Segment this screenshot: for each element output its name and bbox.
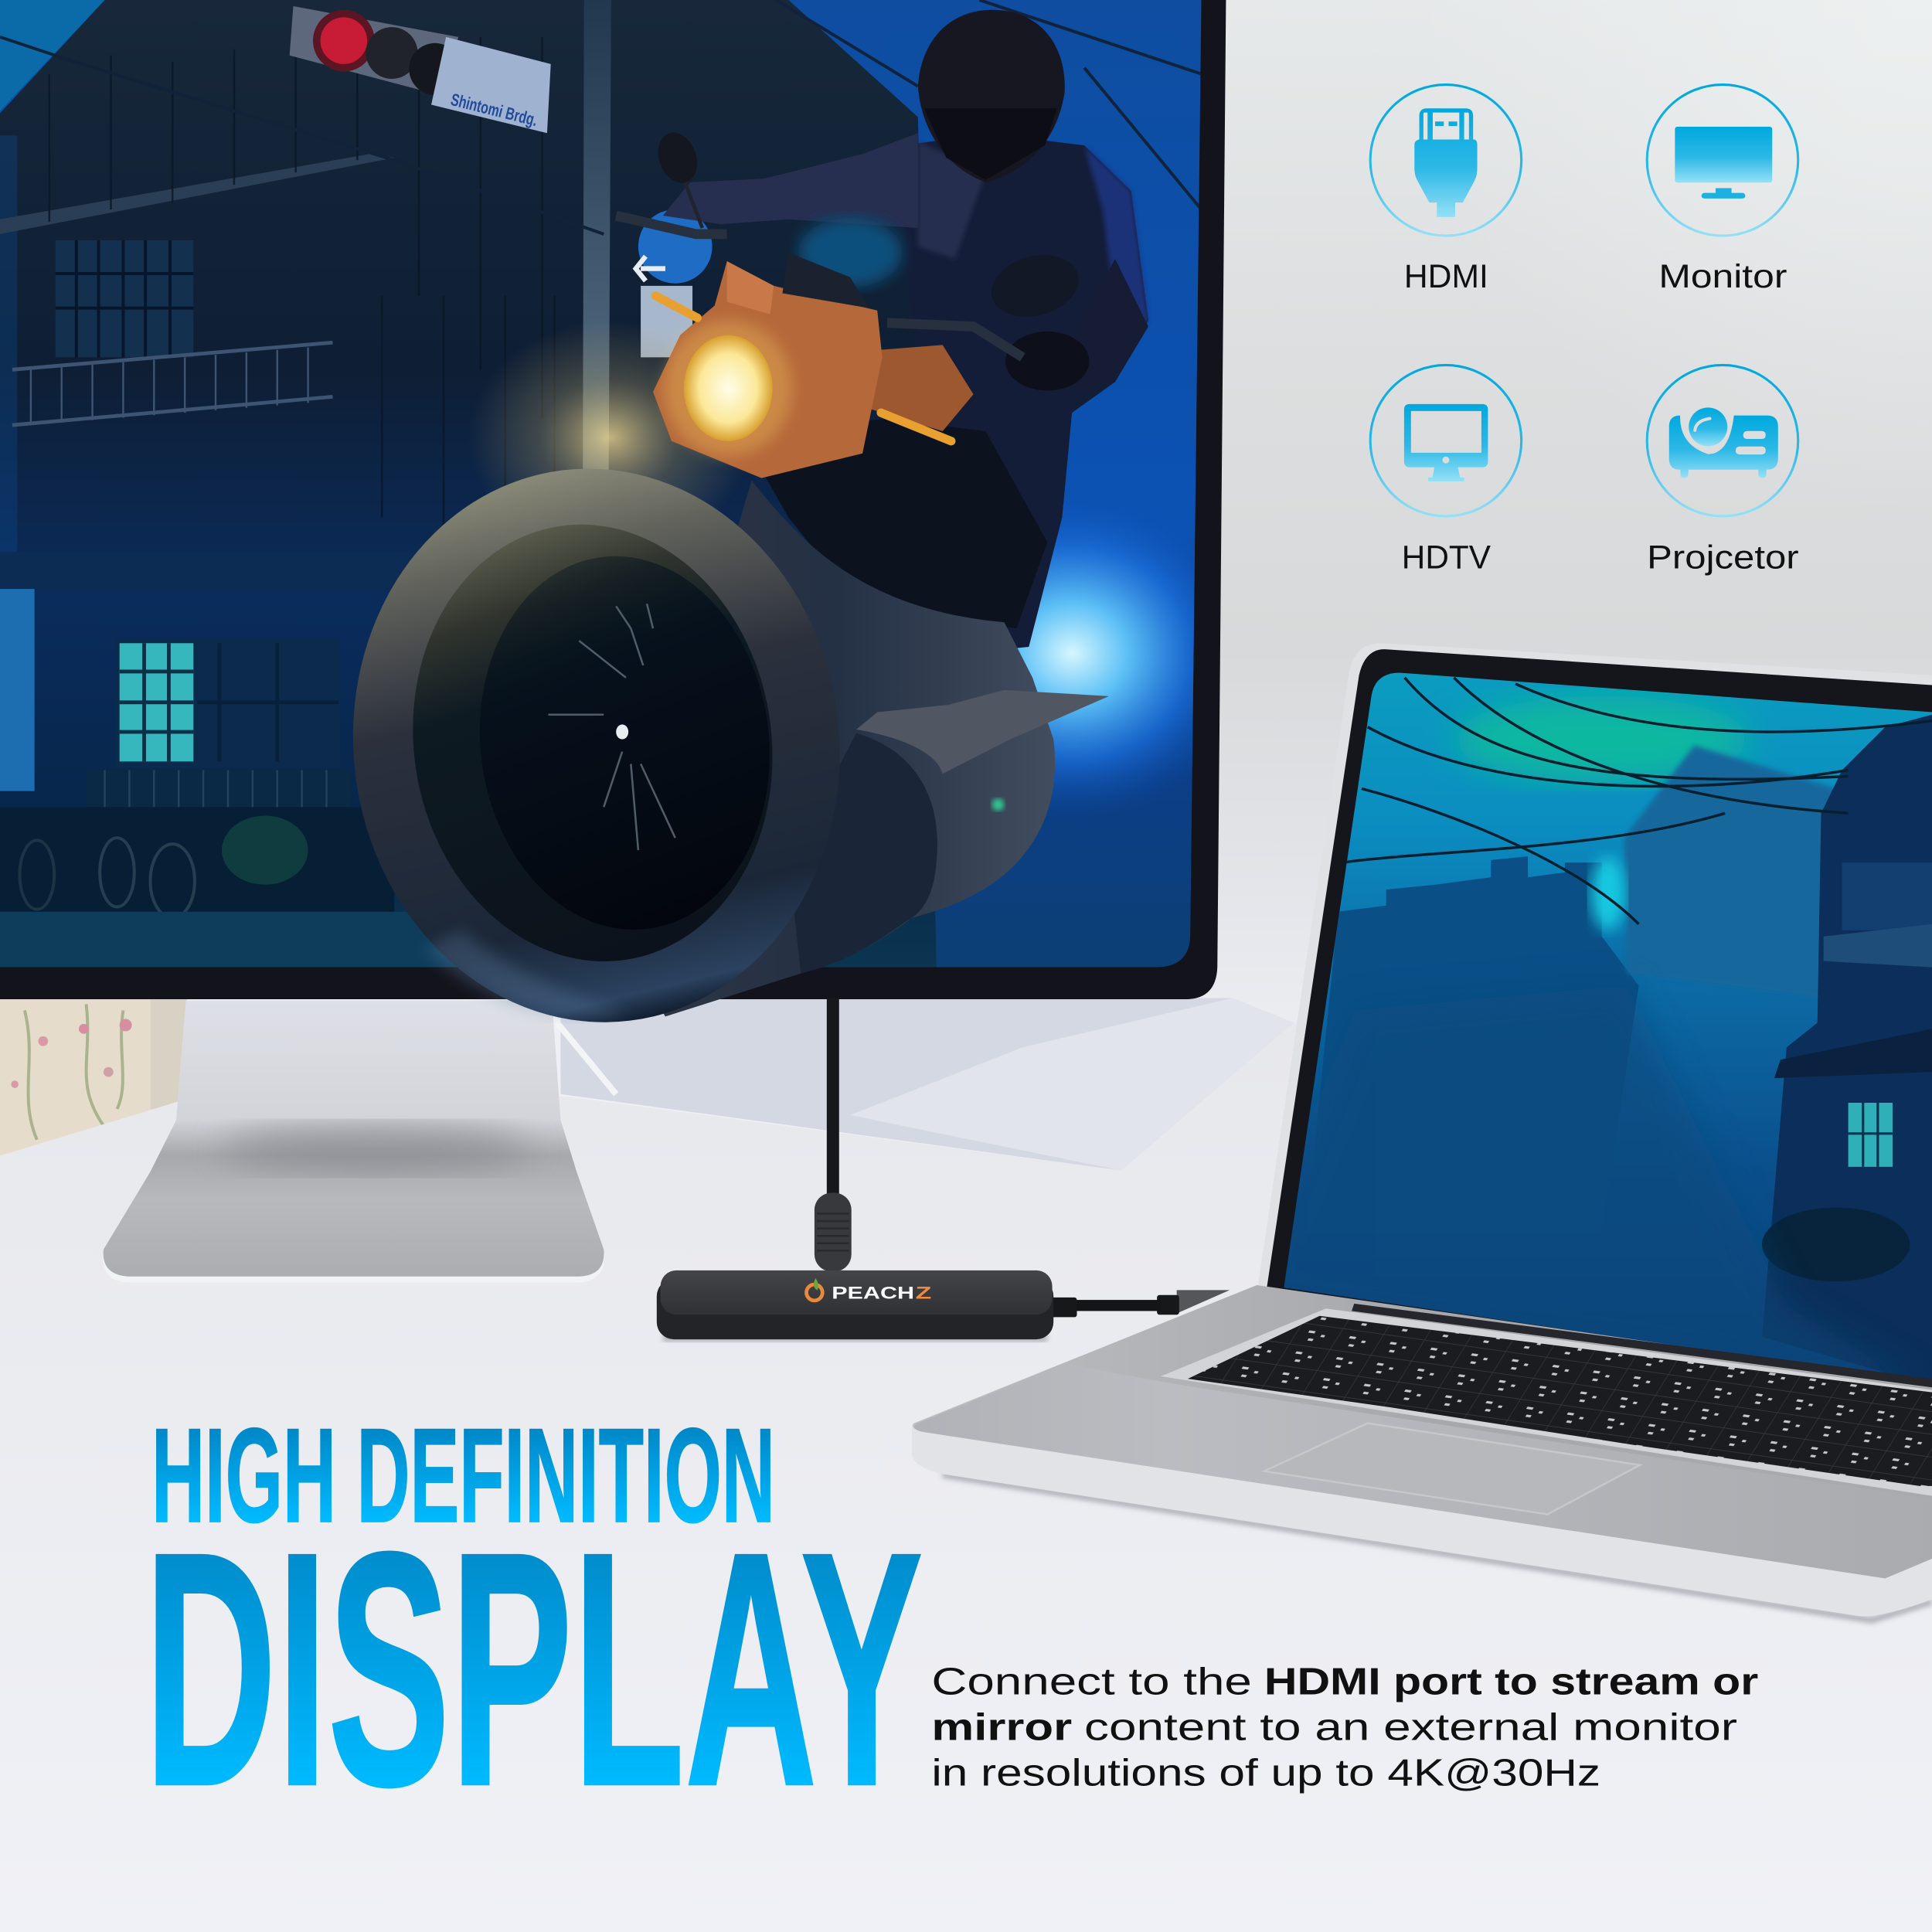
- logo: PEACH: [832, 1283, 914, 1302]
- hub: [657, 1270, 1053, 1342]
- jacket highlight: [918, 141, 986, 259]
- engine inner: [459, 539, 791, 947]
- engine mesh: [382, 498, 804, 988]
- hub top plate: [661, 1270, 1053, 1315]
- wall reflection behind monitor: [560, 998, 1294, 1171]
- label: projector: Projcetor: [1647, 539, 1799, 576]
- upper eave: [0, 154, 394, 234]
- rider torso: [906, 133, 1148, 653]
- left mirror: [651, 127, 704, 228]
- handlebar: [616, 216, 1022, 357]
- right glow on shoulder: [1084, 145, 1148, 357]
- street sign: [431, 37, 551, 133]
- right mirror: [985, 246, 1086, 326]
- monitor: [0, 0, 1257, 1283]
- laptop base: [912, 1285, 1932, 1621]
- bezel: [0, 0, 1226, 999]
- ferrite: [815, 1192, 852, 1271]
- description: content to an external monitor: [1084, 1706, 1737, 1748]
- reflection light facet: [850, 998, 1294, 1171]
- sky corner: [0, 0, 105, 111]
- cable to monitor: [815, 998, 852, 1271]
- stand shadow: [222, 1124, 530, 1173]
- fog floor: [1232, 986, 1932, 1393]
- planks: [49, 37, 554, 543]
- middle eave: [0, 552, 35, 589]
- keyboard well: [1161, 1308, 1932, 1496]
- fuel tank: [862, 345, 974, 431]
- rim shine: [425, 930, 628, 1015]
- house: [0, 0, 937, 968]
- scoop: [788, 733, 937, 974]
- usb plug: [1177, 1290, 1230, 1314]
- label: hdmi: HDMI: [1404, 258, 1488, 295]
- indicators: [655, 296, 951, 441]
- blue light glow: [1017, 522, 1195, 807]
- table top: [0, 1022, 1932, 1932]
- central building: [1624, 746, 1836, 998]
- logo: [807, 1281, 931, 1302]
- helmet: [918, 10, 1065, 182]
- description: HDMI port to stream or: [1264, 1660, 1758, 1702]
- fence and bikes: [0, 770, 394, 918]
- icon: projector: [1647, 365, 1798, 516]
- right building: [1762, 715, 1932, 1386]
- road: [0, 912, 454, 968]
- left arm: [663, 133, 918, 228]
- logo: Z: [916, 1283, 931, 1302]
- warm headlight glow: [468, 321, 752, 554]
- sky: [0, 0, 1202, 968]
- street sign: Shintomi Brdg.: [449, 90, 539, 130]
- device icons: [1370, 85, 1799, 576]
- fin: [856, 690, 1109, 774]
- base shadow: [943, 1475, 1932, 1621]
- keys: [1188, 1316, 1932, 1486]
- upper window: [56, 240, 193, 357]
- rider: [616, 10, 1148, 653]
- city silhouette: [1306, 856, 1639, 1232]
- motorcycle jet illustration: [321, 10, 1148, 1050]
- headlight: [664, 321, 792, 456]
- palm rest: [914, 1364, 1932, 1578]
- stand: [103, 1001, 604, 1283]
- balcony: [12, 342, 332, 425]
- right arm: [1004, 259, 1148, 392]
- hub shadow: [663, 1335, 1047, 1342]
- pole: [583, 0, 611, 474]
- laptop: [912, 643, 1932, 1621]
- icon: monitor: [1647, 85, 1798, 236]
- icon: hdtv: [1370, 365, 1522, 516]
- base lip: [912, 1285, 1932, 1616]
- hub lower body: [657, 1279, 1053, 1339]
- wallpaper: [0, 998, 187, 1158]
- right hand: [1005, 332, 1089, 390]
- wall: [1183, 0, 1932, 1047]
- usb strain relief: [1157, 1295, 1179, 1315]
- road signs: [636, 209, 713, 357]
- frame: [740, 419, 1047, 628]
- wires: [0, 0, 1202, 234]
- title line two: DISPLAY: [145, 1484, 923, 1855]
- icon: hdmi: [1370, 85, 1522, 236]
- description: Connect to the: [931, 1660, 1252, 1702]
- lid silver: [1257, 643, 1932, 1393]
- traffic light: [290, 6, 461, 96]
- lower window: [116, 638, 340, 767]
- description: [931, 1660, 1758, 1794]
- usb cable: [1051, 1290, 1230, 1317]
- engine rim: [321, 440, 871, 1050]
- hinge strip: [1352, 1304, 1932, 1387]
- title line one: HIGH DEFINITION: [151, 1400, 775, 1550]
- screen scene: [0, 0, 1257, 968]
- description: in resolutions of up to 4K@30Hz: [931, 1751, 1600, 1794]
- title: [145, 1400, 923, 1855]
- fairing: [653, 253, 883, 478]
- base deck: [913, 1285, 1932, 1578]
- green sky glow: [1454, 696, 1750, 782]
- label: hdtv: HDTV: [1402, 539, 1491, 576]
- lid bezel: [1267, 649, 1932, 1386]
- green light: [992, 798, 1004, 811]
- teal glow under arm: [798, 218, 902, 287]
- description: mirror: [931, 1706, 1072, 1748]
- jet body: [616, 481, 1109, 1016]
- white cable behind stand: [552, 1016, 616, 1094]
- label: monitor: Monitor: [1658, 258, 1787, 295]
- laptop screen: [1232, 673, 1932, 1393]
- power wires: [1343, 678, 1932, 924]
- usb wire: [1072, 1300, 1161, 1311]
- trackpad: [1264, 1423, 1640, 1515]
- lamp glow: [1590, 856, 1625, 930]
